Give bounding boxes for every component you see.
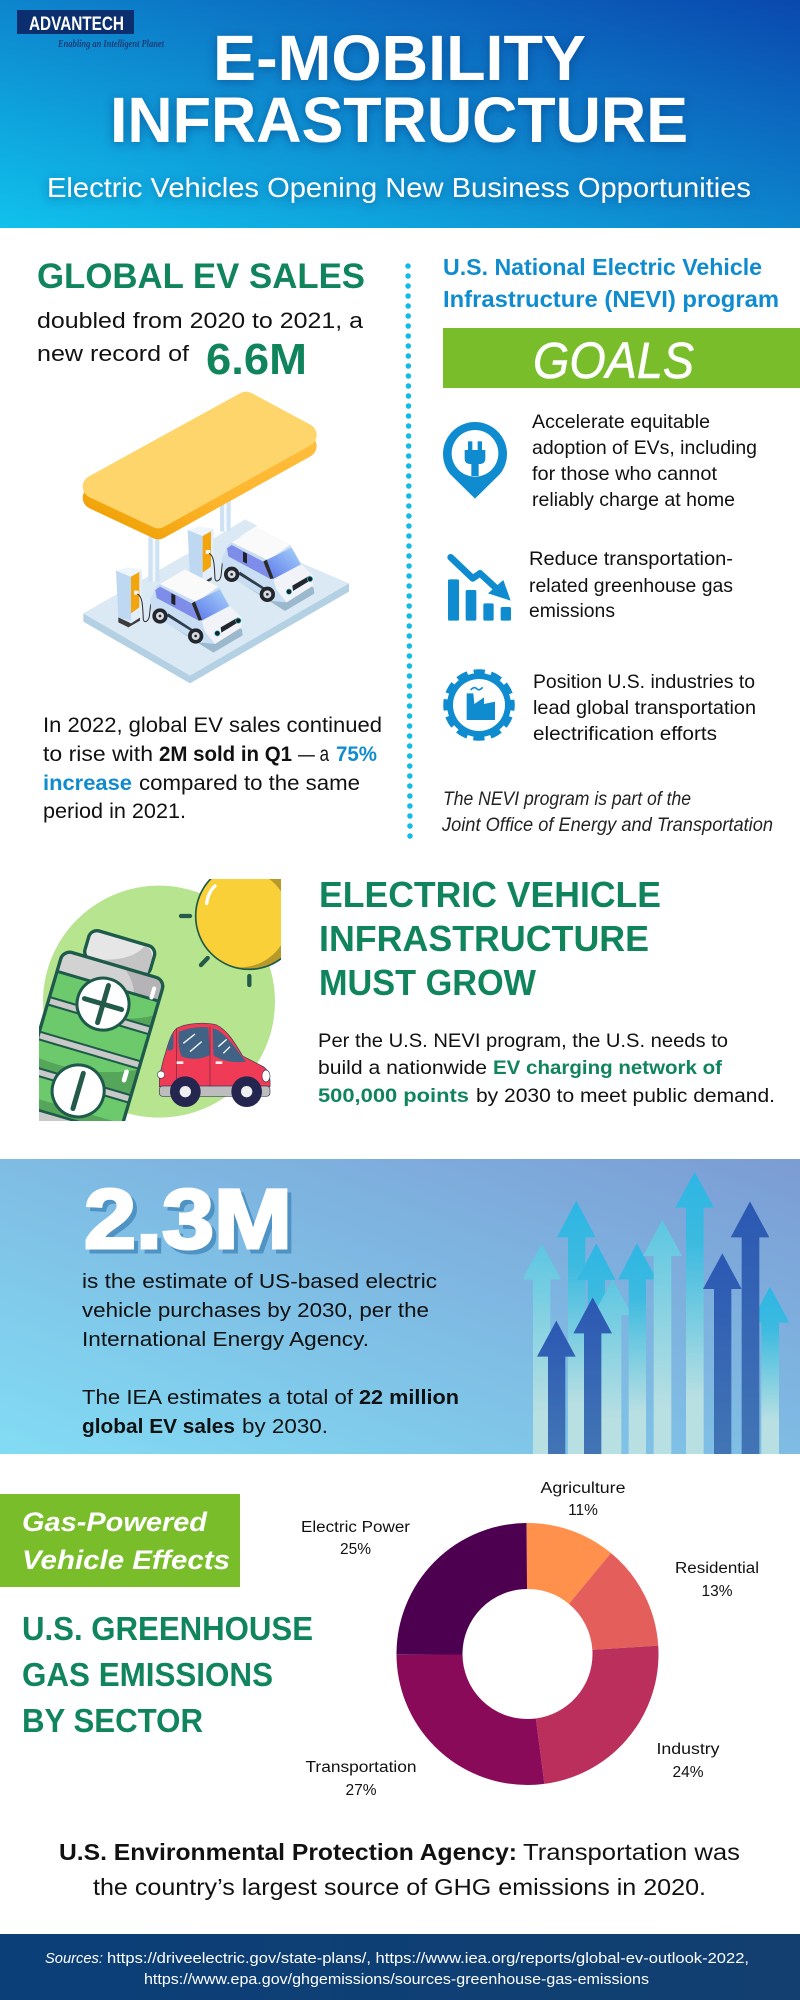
text: goal 3: lead global transportation — [533, 697, 756, 719]
text: 2022 sales: — a — [298, 742, 329, 766]
text: goal 1: adoption of EVs, including — [532, 437, 757, 459]
label: electric power: Electric Power — [301, 1519, 410, 1536]
text: 500,000 points: Per the U.S. NEVI program, the U.S. needs to — [318, 1030, 728, 1052]
heading: infrastructure must grow — [319, 874, 661, 1003]
label: residential: Residential — [675, 1560, 759, 1577]
label: transportation: Transportation — [306, 1759, 416, 1776]
heading: NEVI program: U.S. National Electric Vehicle — [443, 254, 762, 280]
label: agriculture — [540, 1480, 626, 1519]
text: goal 2: emissions — [529, 600, 615, 622]
text: EPA statement: U.S. Environmental Protection Agency: — [59, 1839, 517, 1865]
heading: NEVI program: Infrastructure (NEVI) program — [443, 286, 779, 312]
footer: sources: https://driveelectric.gov/state-plans/, https://www.iea.org/reports/global-ev-outlook-2022, — [107, 1950, 749, 1967]
text: goal 3 — [533, 671, 756, 745]
footer: sources — [0, 1934, 800, 2000]
heading: emissions by sector: U.S. GREENHOUSE — [22, 1610, 313, 1647]
tag: gas-powered vehicle effects — [0, 1494, 240, 1587]
tag: gas-powered vehicle effects: Gas-Powered — [22, 1507, 208, 1537]
title: INFRASTRUCTURE — [110, 84, 688, 156]
illustration: charging station — [83, 403, 349, 683]
label: transportation — [306, 1759, 416, 1799]
panel: greenhouse gas emissions — [0, 1480, 759, 1900]
heading: infrastructure must grow: MUST GROW — [319, 962, 536, 1003]
banner: goals — [443, 328, 800, 389]
text: 22 million — [82, 1386, 459, 1438]
logo: Advantech: Enabling an Intelligent Planet — [57, 39, 165, 50]
panel: header banner — [0, 0, 800, 228]
title — [110, 22, 688, 156]
text: 500,000 points — [318, 1030, 775, 1107]
text: 2022 sales: 2M sold in Q1 — [159, 742, 292, 766]
panel: 2.3M purchases — [0, 1159, 800, 1454]
label: electric power — [301, 1519, 410, 1558]
text: doubled statement: doubled from 2020 to 2021, a — [37, 308, 364, 333]
label: agriculture: 11% — [568, 1502, 598, 1519]
text: goal 2: Reduce transportation- — [529, 548, 733, 570]
text: IEA estimate: is the estimate of US-based electric — [82, 1270, 437, 1293]
text: 22 million: by 2030. — [242, 1415, 328, 1438]
text: 500,000 points: build a nationwide — [318, 1057, 487, 1079]
text: 2022 sales: period in 2021. — [43, 799, 186, 823]
stat: 2.3M: 2.3M — [88, 1176, 296, 1270]
panel: global EV sales — [37, 257, 382, 823]
logo: Advantech — [17, 10, 165, 50]
sun — [178, 879, 281, 988]
panel: NEVI program goals — [441, 254, 800, 836]
label: industry: Industry — [656, 1741, 720, 1758]
heading: emissions by sector — [22, 1610, 313, 1739]
label: industry: 24% — [672, 1764, 704, 1781]
heading: emissions by sector: GAS EMISSIONS — [22, 1656, 273, 1693]
text: 2022 sales: 75% — [336, 742, 377, 766]
text: 2022 sales: to rise with — [43, 742, 153, 766]
text: IEA estimate: International Energy Agency. — [82, 1328, 369, 1351]
text: goal 1: for those who cannot — [532, 463, 718, 485]
heading: NEVI program — [443, 254, 779, 312]
footer: sources: Sources: — [45, 1950, 103, 1967]
label: electric power: 25% — [340, 1541, 371, 1558]
text: EPA statement: the country’s largest source of GHG emissions in 2020. — [93, 1874, 706, 1900]
heading: infrastructure must grow: INFRASTRUCTURE — [319, 918, 649, 959]
note: joint office: The NEVI program is part of the — [443, 789, 691, 810]
text: doubled statement — [37, 308, 364, 366]
banner: goals: GOALS — [533, 332, 694, 389]
label: residential — [675, 1560, 759, 1600]
text: goal 2 — [529, 548, 733, 622]
label: agriculture: Agriculture — [540, 1480, 626, 1497]
text: 22 million: global EV sales — [82, 1415, 235, 1438]
illustration: battery, sun and car — [39, 879, 281, 1121]
text: 22 million: The IEA estimates a total of — [82, 1386, 353, 1409]
panel: infrastructure must grow — [318, 874, 775, 1107]
text: 2022 sales — [43, 713, 382, 823]
stat: 6.6M: 6.6M — [206, 335, 307, 384]
title: E-MOBILITY — [213, 22, 586, 94]
heading: global EV sales: GLOBAL EV SALES — [37, 257, 365, 296]
text: goal 2: related greenhouse gas — [529, 575, 733, 597]
text: 22 million: 22 million — [359, 1386, 459, 1409]
battery — [39, 929, 164, 1121]
footer: sources: https://www.epa.gov/ghgemissions/sources-greenhouse-gas-emissions — [144, 1971, 649, 1988]
text: EPA statement — [59, 1839, 740, 1900]
text: goal 1 — [532, 411, 757, 511]
text: 500,000 points: 500,000 points — [318, 1085, 469, 1107]
text: 2022 sales: increase — [43, 771, 132, 795]
text: goal 3: electrification efforts — [533, 723, 717, 745]
label: residential: 13% — [701, 1583, 733, 1600]
text: goal 1: reliably charge at home — [532, 489, 735, 511]
stat: 2.3M: 2.3M — [84, 1172, 292, 1266]
subtitle: Electric Vehicles Opening New Business Opportunities — [47, 172, 751, 203]
text: 2022 sales: In 2022, global EV sales continued — [43, 713, 382, 737]
label: industry — [656, 1741, 720, 1781]
note: joint office — [441, 789, 773, 836]
chart: donut of emissions by sector — [301, 1480, 759, 1799]
text: IEA estimate — [82, 1270, 437, 1351]
logo: Advantech: ADVANTECH — [29, 14, 124, 35]
text: 500,000 points: by 2030 to meet public demand. — [476, 1085, 775, 1107]
heading: emissions by sector: BY SECTOR — [22, 1702, 203, 1739]
icon: charging pin — [443, 422, 507, 499]
icon: industry gear — [446, 672, 512, 738]
icon: declining emissions chart — [448, 557, 511, 621]
text: EPA statement: Transportation was — [523, 1839, 740, 1865]
heading: infrastructure must grow: ELECTRIC VEHICLE — [319, 874, 661, 915]
label: transportation: 27% — [345, 1782, 377, 1799]
icon: rising arrows — [522, 1172, 789, 1454]
text: goal 3: Position U.S. industries to — [533, 671, 755, 693]
text: 500,000 points: EV charging network of — [493, 1057, 722, 1079]
text: doubled statement: new record of — [37, 341, 190, 366]
note: joint office: Joint Office of Energy and Transportation — [441, 815, 773, 836]
text: goal 1: Accelerate equitable — [532, 411, 710, 433]
tag: gas-powered vehicle effects: Vehicle Effects — [22, 1545, 230, 1575]
red car — [157, 1023, 270, 1107]
text: IEA estimate: vehicle purchases by 2030, per the — [82, 1299, 429, 1322]
text: 2022 sales: compared to the same — [139, 771, 360, 795]
